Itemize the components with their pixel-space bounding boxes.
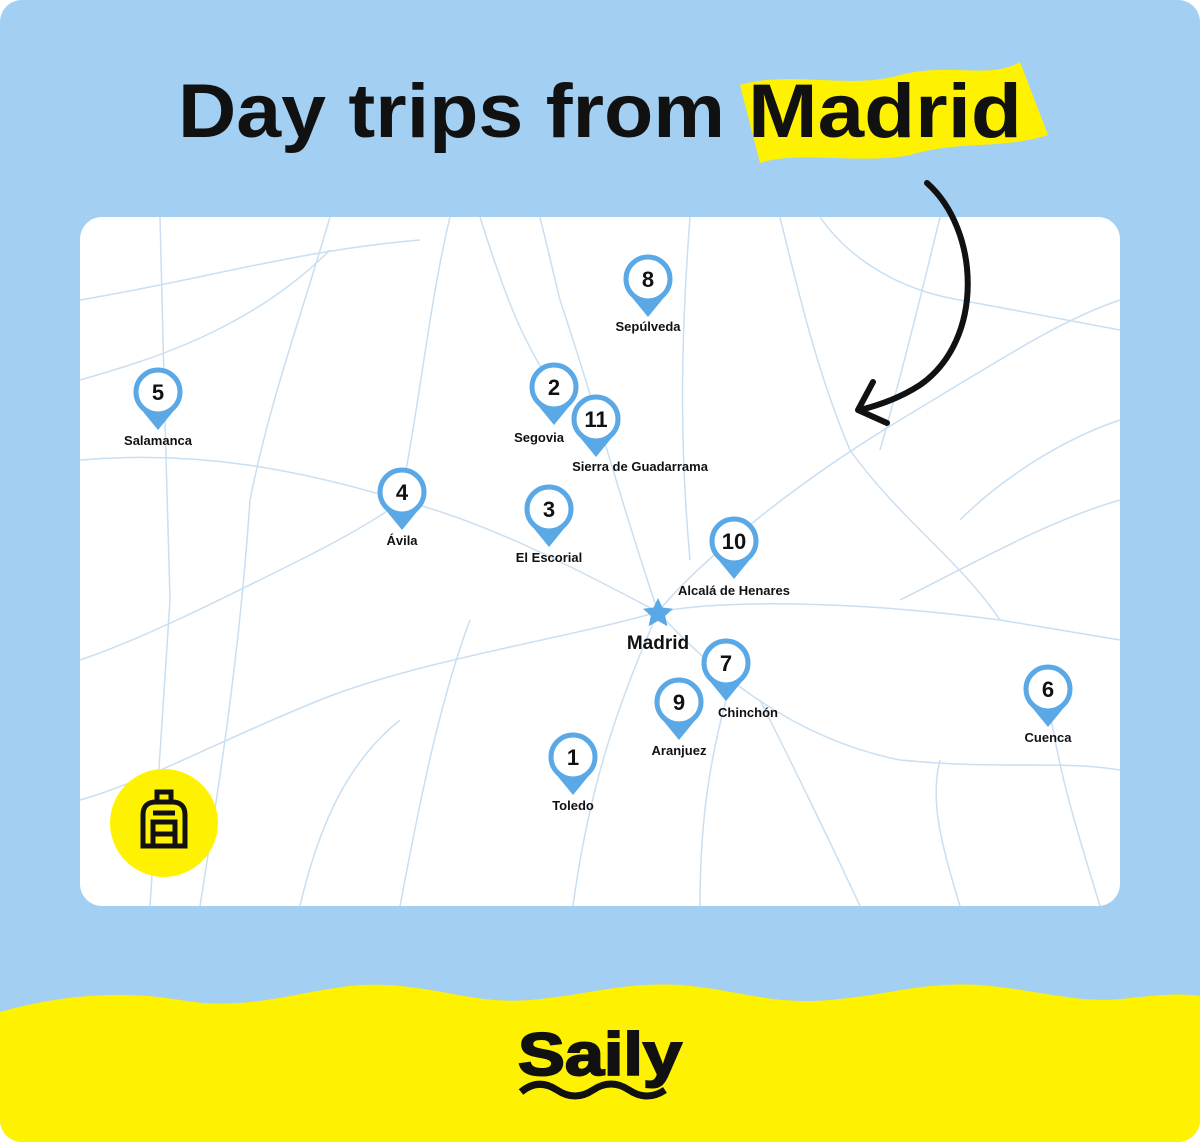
pins: Salamanca [124, 433, 193, 448]
pins: 9 [673, 690, 685, 715]
pins: 7 [720, 651, 732, 676]
pins: 2 [548, 375, 560, 400]
footer wave [0, 985, 1200, 1142]
pins: 11 [584, 407, 608, 432]
title highlight [740, 62, 1048, 163]
arrow [858, 183, 968, 423]
pins: El Escorial [516, 550, 582, 565]
pins: Segovia [514, 430, 565, 445]
pins: 1 [567, 745, 579, 770]
pins: Chinchón [718, 705, 778, 720]
pins: Sepúlveda [615, 319, 681, 334]
star: Madrid [643, 598, 673, 626]
pins [124, 257, 1072, 813]
pins: 6 [1042, 677, 1054, 702]
pins: Ávila [386, 533, 418, 548]
title: Madrid [748, 69, 1022, 154]
pins: Alcalá de Henares [678, 583, 790, 598]
map panel [80, 217, 1120, 906]
logo: Saily: Saily [518, 1021, 683, 1088]
pins: Toledo [552, 798, 594, 813]
pins: 10 [722, 529, 746, 554]
pins: Cuenca [1025, 730, 1072, 745]
pins: Aranjuez [652, 743, 707, 758]
pins: 4 [396, 480, 409, 505]
title: Day trips from [178, 69, 725, 154]
pins: 3 [543, 497, 555, 522]
pins: Sierra de Guadarrama [572, 459, 709, 474]
icon: backpack [110, 769, 218, 877]
pins: 8 [642, 267, 654, 292]
map panel: Madrid [627, 633, 689, 654]
pins: 5 [152, 380, 164, 405]
